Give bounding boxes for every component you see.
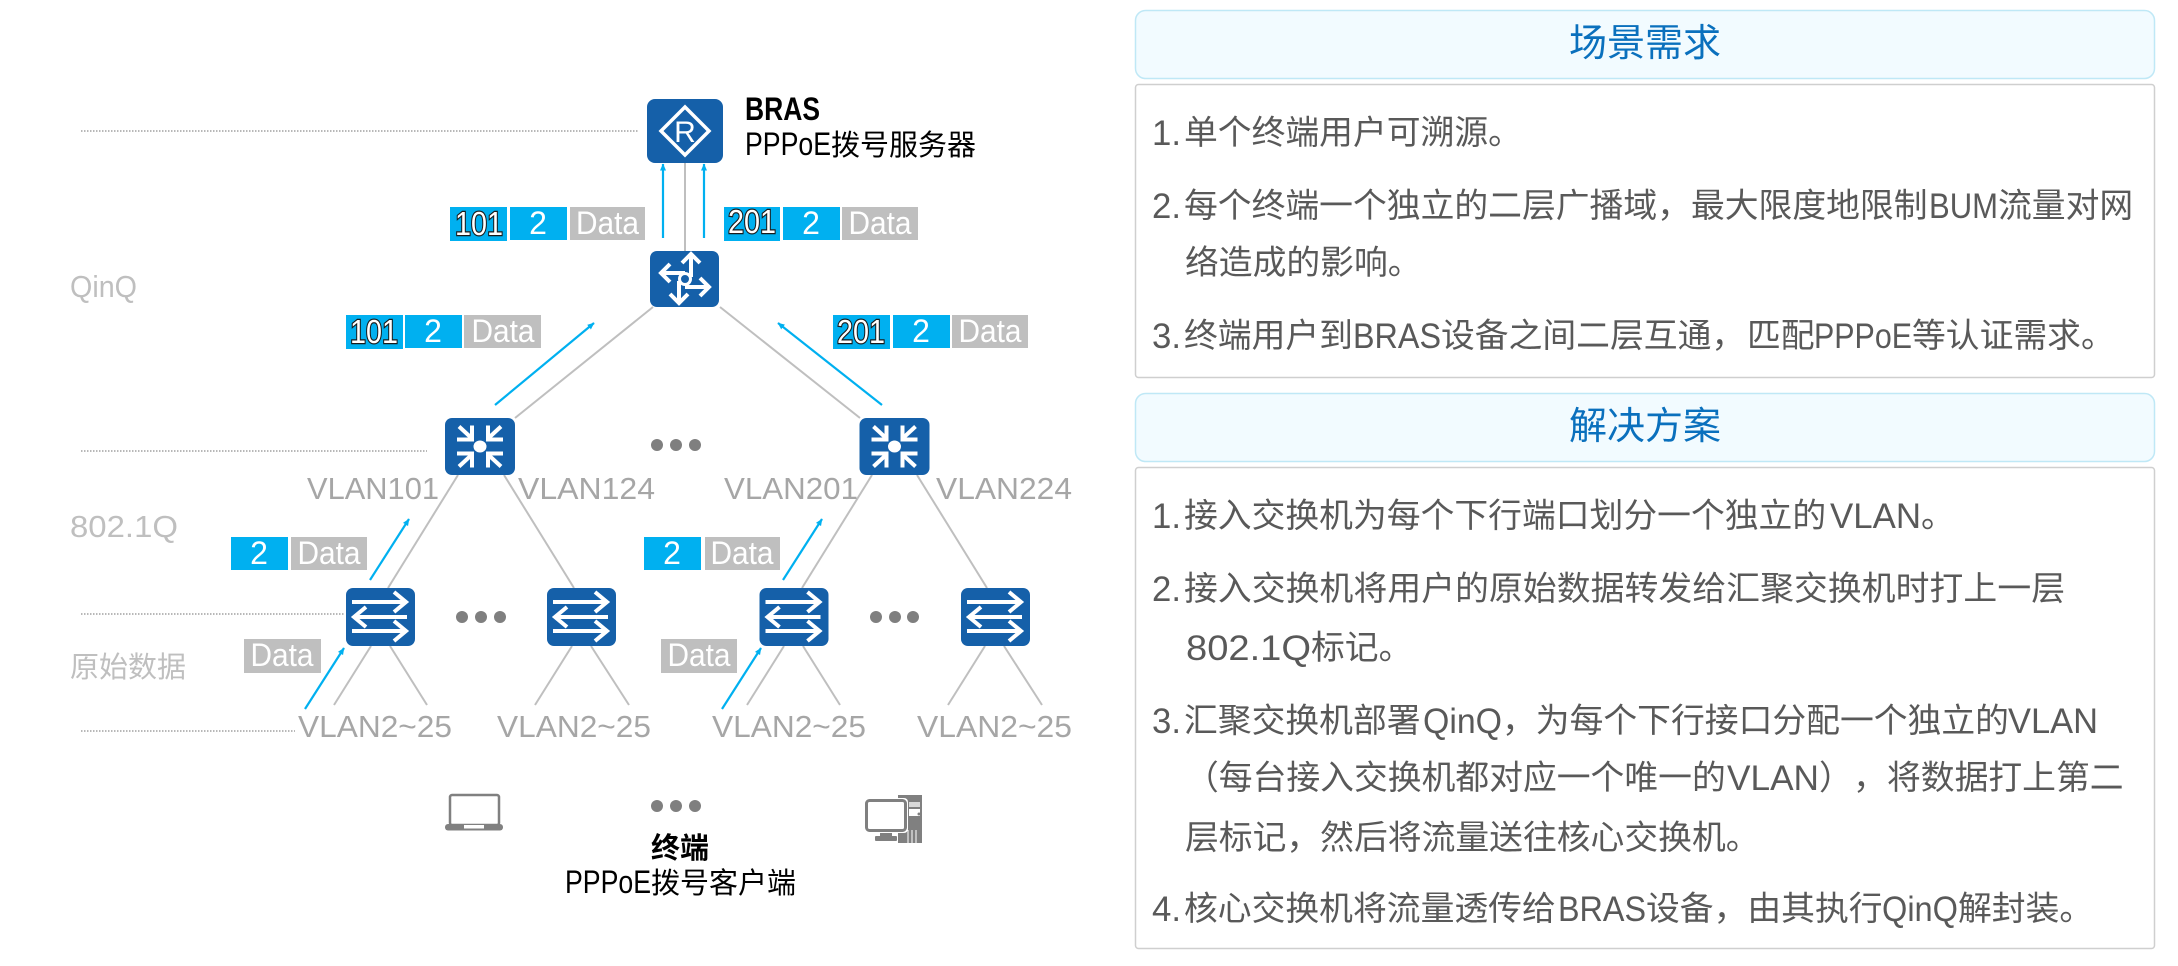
packet label: 2 Data left: Data bbox=[298, 535, 361, 571]
label: PPPoE client bbox=[565, 864, 796, 900]
icon: access switch 1 bbox=[346, 588, 415, 646]
network links bbox=[334, 163, 1042, 705]
icon: access switch 3 bbox=[760, 588, 828, 646]
icon: aggregation switch left bbox=[445, 418, 515, 475]
panel: network topology diagram bbox=[70, 91, 1072, 900]
arrows: upstream traffic bbox=[305, 164, 882, 709]
packet label: 201 2 Data top bbox=[724, 203, 918, 241]
text block: requirements list: 2. bbox=[1152, 187, 1181, 226]
text block: solution list: ， bbox=[1853, 759, 1887, 797]
text block: requirements list: 匹配 bbox=[1747, 317, 1815, 355]
packet label: 201 2 Data top: Data bbox=[848, 205, 912, 241]
text block: solution list: 解封装。 bbox=[1958, 890, 2093, 928]
text block: requirements list: 终端用户到 bbox=[1184, 317, 1353, 355]
icon: laptop bbox=[445, 795, 503, 830]
panel: scenario requirements bbox=[1136, 10, 2154, 378]
text block: requirements list: BUM bbox=[1929, 187, 1998, 226]
text block: solution list: VLAN bbox=[1830, 497, 1921, 536]
packet label: 101 2 Data top bbox=[450, 205, 645, 242]
text block: requirements list: 络造成的影响。 bbox=[1185, 244, 1422, 282]
packet label: 201 2 Data middle: Data bbox=[958, 313, 1022, 349]
icon: BRAS router bbox=[647, 99, 723, 163]
packet label: 201 2 Data middle: 2 bbox=[912, 313, 930, 349]
icon: desktop computer bbox=[864, 795, 922, 843]
icon: BRAS router: R bbox=[674, 116, 696, 149]
packet label: 2 Data left: 2 bbox=[250, 535, 268, 571]
text block: solution list: 802.1Q bbox=[1186, 629, 1311, 668]
heading bar: scenario requirements: 场景需求 bbox=[1569, 23, 1721, 65]
text block: solution list: ） bbox=[1819, 759, 1853, 797]
heading bar: solution: 解决方案 bbox=[1569, 406, 1721, 448]
text block: solution list: 4. bbox=[1152, 890, 1181, 929]
packet label: 101 2 Data middle: Data bbox=[472, 313, 535, 349]
text block: requirements list: 3. bbox=[1152, 317, 1181, 356]
packet label: 101 2 Data middle bbox=[346, 313, 541, 350]
text block: solution list: QinQ bbox=[1882, 890, 1958, 929]
packet label: 101 2 Data top: 101 bbox=[455, 205, 503, 242]
text block: solution list: （每台接入交换机都对应一个唯一的 bbox=[1185, 759, 1726, 797]
packet label: Data left: Data bbox=[250, 637, 314, 673]
layer label: QinQ: QinQ bbox=[70, 269, 137, 304]
text block: solution list: 设备，由其执行 bbox=[1646, 890, 1883, 928]
packet label: 101 2 Data top: Data bbox=[576, 205, 639, 241]
text block: solution list: 核心交换机将流量透传给 bbox=[1184, 890, 1556, 928]
text block: solution list: 3. bbox=[1152, 702, 1181, 741]
VLAN labels bbox=[298, 471, 1072, 744]
packet label: 201 2 Data middle: 201 bbox=[837, 313, 885, 350]
packet label: 2 Data right: 2 bbox=[663, 535, 681, 571]
text block: solution list: ，为每个下行接口分配一个独立的 bbox=[1502, 702, 2009, 740]
VLAN labels: VLAN224 bbox=[936, 471, 1072, 506]
packet label: 2 Data right bbox=[644, 535, 780, 571]
packet label: 201 2 Data top: 2 bbox=[802, 205, 820, 241]
label: PPPoE client: 拨号客户端 bbox=[651, 867, 796, 900]
packet label: 2 Data left bbox=[231, 535, 367, 571]
text block: solution list: VLAN bbox=[2008, 702, 2098, 741]
text block: solution list: 将数据打上第二 bbox=[1887, 759, 2124, 797]
text block: requirements list bbox=[1136, 84, 2154, 378]
label: PPPoE server: PPPoE bbox=[745, 126, 831, 162]
label: PPPoE server bbox=[745, 126, 976, 162]
panel: solution bbox=[1136, 394, 2154, 948]
text block: solution list: BRAS bbox=[1558, 890, 1646, 929]
icon: aggregation switch right bbox=[860, 418, 930, 475]
text block: solution list: 接入交换机将用户的原始数据转发给汇聚交换机时打上一层 bbox=[1184, 570, 2065, 608]
label: PPPoE server: 拨号服务器 bbox=[831, 129, 976, 162]
packet label: 201 2 Data top: 201 bbox=[728, 203, 776, 240]
layer guide lines bbox=[81, 131, 638, 731]
text block: solution list: VLAN bbox=[1727, 759, 1819, 798]
text block: solution list: 汇聚交换机部署 bbox=[1184, 702, 1421, 740]
text block: solution list: QinQ bbox=[1423, 702, 1502, 741]
text block: solution list: 。 bbox=[1921, 497, 1955, 535]
ellipsis dots bbox=[456, 439, 919, 812]
label: PPPoE client: PPPoE bbox=[565, 864, 651, 900]
text block: solution list bbox=[1136, 468, 2154, 948]
text block: solution list: 层标记，然后将流量送往核心交换机。 bbox=[1185, 819, 1760, 857]
icon: core switch bbox=[650, 251, 719, 307]
text block: solution list: 1. bbox=[1152, 497, 1181, 536]
packet label: 201 2 Data middle bbox=[833, 313, 1028, 350]
VLAN labels: VLAN101 bbox=[307, 471, 439, 506]
icon: access switch 2 bbox=[547, 588, 616, 646]
text block: requirements list: 每个终端一个独立的二层广播域，最大限度地限制 bbox=[1184, 187, 1928, 225]
packet label: 101 2 Data middle: 101 bbox=[350, 313, 398, 350]
layer label: 802.1Q: 802.1Q bbox=[70, 509, 178, 544]
VLAN labels: VLAN124 bbox=[518, 471, 655, 506]
label: BRAS: BRAS bbox=[745, 91, 820, 127]
VLAN labels: VLAN201 bbox=[724, 471, 858, 506]
text block: requirements list: BRAS bbox=[1353, 317, 1441, 356]
label: terminal: 终端 bbox=[651, 832, 709, 865]
text block: solution list: 2. bbox=[1152, 570, 1181, 609]
VLAN labels: VLAN2~25 bbox=[298, 709, 452, 744]
packet label: 101 2 Data middle: 2 bbox=[424, 313, 442, 349]
text block: requirements list: 单个终端用户可溯源。 bbox=[1184, 114, 1522, 152]
VLAN labels: VLAN2~25 bbox=[917, 709, 1072, 744]
heading bar: scenario requirements bbox=[1136, 10, 2154, 78]
VLAN labels: VLAN2~25 bbox=[497, 709, 651, 744]
text block: solution list: 标记。 bbox=[1311, 629, 1412, 667]
packet label: 2 Data right: Data bbox=[710, 535, 774, 571]
text block: requirements list: 流量对网 bbox=[1998, 187, 2133, 225]
text block: solution list: 接入交换机为每个下行端口划分一个独立的 bbox=[1184, 497, 1826, 535]
text block: requirements list: 设备之间二层互通， bbox=[1441, 317, 1745, 355]
packet label: 101 2 Data top: 2 bbox=[529, 205, 547, 241]
icon: access switch 4 bbox=[961, 588, 1030, 646]
heading bar: solution bbox=[1136, 394, 2154, 462]
layer label: original data: 原始数据 bbox=[70, 651, 186, 684]
packet label: Data right: Data bbox=[668, 637, 731, 673]
VLAN labels: VLAN2~25 bbox=[712, 709, 866, 744]
text block: requirements list: 1. bbox=[1152, 114, 1181, 153]
text block: requirements list: 等认证需求。 bbox=[1912, 317, 2115, 355]
text block: requirements list: PPPoE bbox=[1814, 317, 1912, 356]
